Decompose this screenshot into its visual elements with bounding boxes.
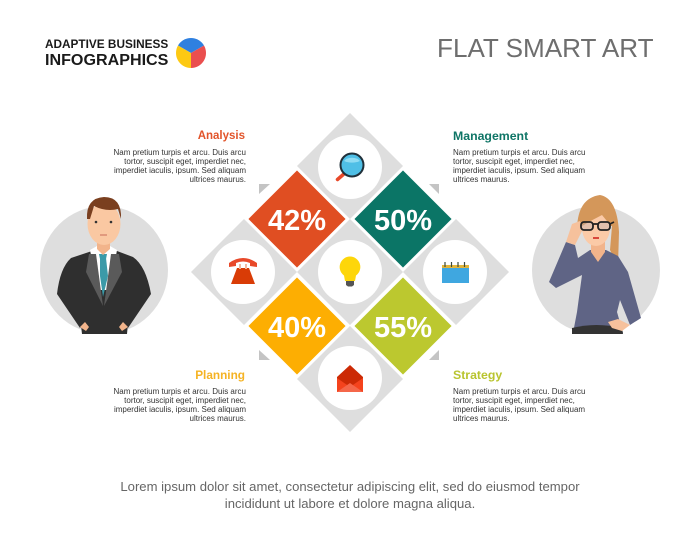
- icon: notepad: [442, 262, 469, 283]
- footer text: Lorem ipsum dolor sit amet, consectetur adipiscing elit, sed do eiusmod tempor: [120, 479, 580, 494]
- Analysis heading: Analysis: [198, 130, 245, 142]
- Planning text: tortor, suscipit eget, imperdiet nec,: [124, 396, 246, 405]
- Management text: Nam pretium turpis et arcu. Duis arcu: [453, 148, 586, 157]
- man portrait: [40, 197, 168, 334]
- shirt and collar: [90, 246, 117, 290]
- woman portrait: [532, 195, 660, 334]
- Strategy text: imperdiet iaculis, ipsum. Sed aliquam: [453, 405, 585, 414]
- Analysis text: imperdiet iaculis, ipsum. Sed aliquam: [114, 166, 246, 175]
- icon: envelope: [337, 365, 363, 392]
- icon: logo pie: [176, 38, 206, 68]
- icon: magnifier: [338, 154, 364, 180]
- Management text: imperdiet iaculis, ipsum. Sed aliquam: [453, 166, 585, 175]
- logo text: [45, 37, 168, 69]
- skirt: [572, 325, 623, 334]
- Strategy heading: Strategy: [453, 368, 502, 382]
- Management text: tortor, suscipit eget, imperdiet nec,: [453, 157, 575, 166]
- diamond 42%: 42%: [268, 205, 326, 237]
- corner triangles: [259, 184, 439, 360]
- lapels: [86, 254, 103, 306]
- raised hand: [566, 221, 583, 245]
- tie: [100, 258, 108, 297]
- Analysis text: ultrices maurus.: [190, 175, 246, 184]
- footer text: [120, 479, 580, 511]
- icon: light bulb: [340, 256, 360, 286]
- diamond 40%: [247, 276, 347, 376]
- hand on hip: [608, 319, 630, 331]
- neck and face: [591, 240, 605, 262]
- Management heading: Management: [453, 129, 528, 143]
- Management text: ultrices maurus.: [453, 175, 509, 184]
- icon: telephone: [229, 258, 257, 284]
- Strategy text: ultrices maurus.: [453, 414, 509, 423]
- blouse: [549, 242, 641, 333]
- logo text: INFOGRAPHICS: [45, 51, 168, 69]
- Management text: [453, 148, 586, 184]
- Strategy text: Nam pretium turpis et arcu. Duis arcu: [453, 387, 586, 396]
- Planning heading: Planning: [195, 368, 245, 382]
- Planning text: [114, 387, 246, 423]
- Strategy text: tortor, suscipit eget, imperdiet nec,: [453, 396, 575, 405]
- gray diamonds: [191, 113, 509, 432]
- glasses: [581, 222, 614, 230]
- logo text: ADAPTIVE BUSINESS: [45, 37, 168, 51]
- Analysis text: tortor, suscipit eget, imperdiet nec,: [124, 157, 246, 166]
- Planning text: Nam pretium turpis et arcu. Duis arcu: [114, 387, 246, 396]
- Planning text: imperdiet iaculis, ipsum. Sed aliquam: [114, 405, 246, 414]
- diamond 55%: 55%: [374, 312, 432, 344]
- diamond grid: [191, 113, 509, 432]
- jacket: [57, 251, 151, 334]
- diamond 42%: [247, 169, 347, 269]
- diamond 55%: [353, 276, 453, 376]
- diamond 50%: [353, 169, 453, 269]
- diamond 50%: 50%: [374, 205, 432, 237]
- main title: FLAT SMART ART: [437, 33, 654, 63]
- hair: [577, 195, 619, 266]
- footer text: incididunt ut labore et dolore magna aliqua.: [225, 496, 475, 511]
- white circles: [211, 135, 487, 410]
- Analysis text: Nam pretium turpis et arcu. Duis arcu: [114, 148, 246, 157]
- diamond 40%: 40%: [268, 312, 326, 344]
- Analysis text: [114, 148, 246, 184]
- Strategy text: [453, 387, 586, 423]
- Planning text: ultrices maurus.: [190, 414, 246, 423]
